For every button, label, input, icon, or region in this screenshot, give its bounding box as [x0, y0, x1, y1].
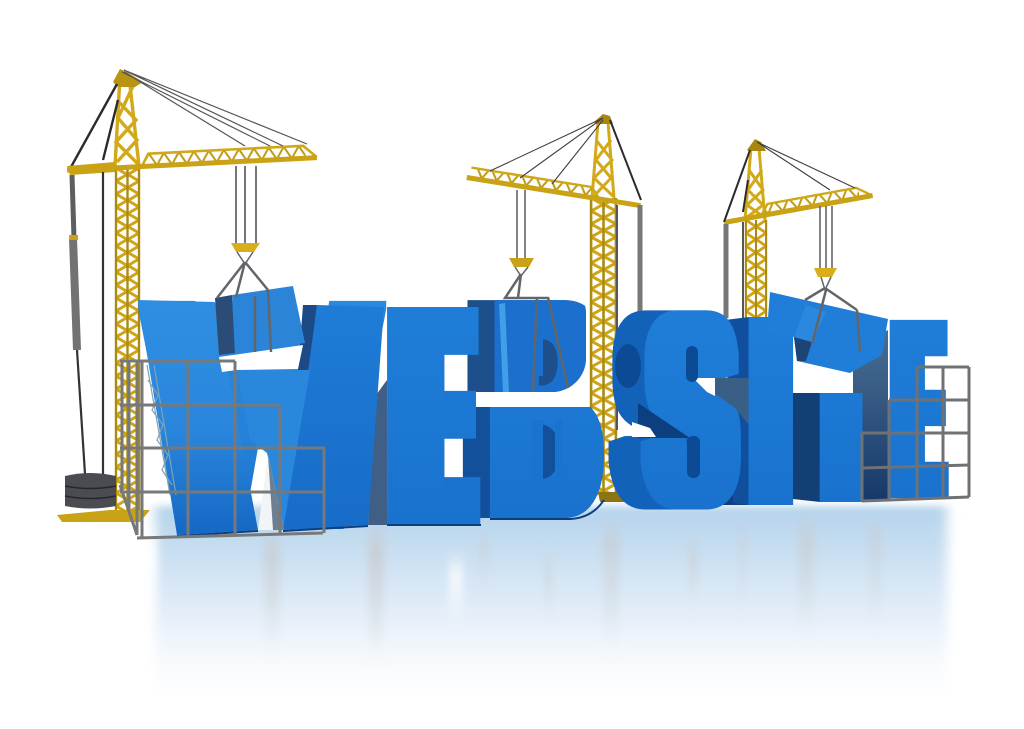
crane 3 hoist ropes — [820, 206, 832, 268]
S void right — [693, 378, 749, 425]
crane 1 tower — [115, 168, 140, 513]
crane 2 back stay — [610, 120, 641, 200]
W left diagonal — [138, 300, 258, 535]
crane 1 head — [113, 69, 143, 87]
streak E to B — [481, 535, 487, 595]
word: WEBSITE — [138, 286, 949, 536]
crane 2 jib — [466, 166, 642, 208]
crane 3 cables — [724, 224, 728, 318]
S lower dark wedge — [638, 403, 690, 438]
crane 2 base — [598, 492, 628, 502]
W top-side extrusion — [298, 305, 317, 372]
T bar facet — [794, 305, 826, 342]
letter T stem front: T — [780, 262, 902, 558]
B sling — [505, 274, 568, 392]
crane 3 — [722, 139, 873, 320]
T bar shading — [794, 337, 812, 361]
streak in S — [689, 545, 697, 605]
crane 3 tower — [745, 220, 767, 320]
T sling — [805, 288, 860, 352]
left scaffold — [120, 361, 325, 538]
streak at W to E — [368, 535, 384, 655]
W sling — [217, 262, 271, 352]
W chunk front — [232, 286, 305, 353]
crane 2 upper tower — [592, 122, 614, 198]
S upper slot — [686, 346, 698, 382]
crane 1 counter jib — [67, 162, 115, 175]
crane 2 ties — [490, 118, 603, 184]
crane 1 — [57, 69, 317, 522]
crane 1 upper tower — [115, 76, 139, 166]
T bar front — [767, 292, 888, 373]
letter I extrusion — [725, 317, 749, 505]
S white gap left — [632, 422, 656, 437]
crane 2 hoist ropes — [517, 190, 525, 258]
crane 3 back stays — [724, 150, 750, 222]
letter B upper front: B — [496, 237, 604, 581]
letter B upper extrusion: B — [496, 237, 604, 581]
letter T stem extrusion — [793, 393, 820, 502]
S extrusion dark inset — [615, 344, 641, 388]
right scaffold verticals — [862, 367, 969, 502]
crane 3 jib — [722, 185, 873, 225]
crane 2 head — [594, 114, 613, 124]
streak S to I — [738, 530, 746, 610]
streak in B — [545, 560, 552, 620]
crane 3 ties — [757, 142, 855, 190]
B lower hole fill left — [532, 420, 543, 484]
letter W front: W — [149, 235, 378, 593]
floor reflection — [140, 506, 947, 700]
letter B lower front: B — [491, 237, 599, 581]
W notch shade — [268, 455, 284, 530]
crane 1 back stays — [71, 84, 118, 167]
crane 2 hook — [509, 258, 534, 267]
letter B lower extrusion: B — [491, 237, 599, 581]
letter I front: I — [750, 266, 792, 555]
right scaffold — [862, 367, 969, 502]
W right diagonal — [283, 305, 384, 530]
crane 1 weights — [65, 473, 116, 508]
slings — [217, 252, 860, 392]
crane 1 counterweight cables — [72, 175, 74, 238]
hanging T bar — [767, 292, 888, 373]
crane 3 hook — [814, 268, 837, 277]
W middle apex — [237, 370, 310, 530]
crane 1 weight lines — [65, 486, 116, 498]
crane 1 hoist ropes — [236, 166, 256, 243]
reflection band — [155, 506, 947, 700]
W gap — [219, 345, 303, 372]
crane 1 ties — [122, 70, 307, 146]
reflection streaks — [140, 525, 882, 655]
shadow between W and E — [368, 380, 387, 525]
B lower hole fill right — [555, 420, 562, 484]
crane 1 base — [57, 510, 150, 522]
S white gap — [693, 378, 715, 396]
W chunk side — [215, 295, 235, 355]
streak at W notch — [264, 540, 280, 650]
crane 2 — [466, 114, 642, 502]
crane 1 hook — [231, 243, 260, 252]
letter E front: E — [404, 251, 461, 581]
streak B to S — [603, 530, 619, 650]
crane 2 cables — [638, 205, 642, 316]
crane 2 tower — [590, 198, 617, 498]
B shadow line — [490, 500, 604, 519]
S lower slot — [687, 436, 700, 478]
W shadow line — [177, 526, 368, 536]
shadow between S and I — [690, 400, 749, 505]
void behind T right — [853, 330, 888, 500]
streak T to E — [868, 525, 882, 625]
crane 3 upper tower — [745, 148, 765, 220]
letter S front: S — [651, 269, 732, 552]
white E gap — [449, 565, 463, 625]
left scaffold verticals — [122, 361, 324, 538]
left scaffold horizontals — [120, 361, 325, 538]
streak I to T — [798, 525, 814, 635]
W floor notch — [258, 455, 284, 530]
hanging W chunk — [215, 286, 305, 355]
letter S extrusion: S — [651, 269, 732, 552]
B highlight strip — [499, 303, 509, 392]
letter E (end) front: E — [899, 270, 937, 546]
crane 1 jib truss — [66, 145, 317, 173]
crane lattice seen beside W — [147, 365, 176, 495]
E shadow line — [387, 524, 481, 526]
white at left edge — [140, 540, 156, 630]
sling tips — [237, 252, 831, 290]
crane 3 head — [747, 139, 766, 151]
B upper hole fill — [536, 332, 543, 376]
right scaffold horizontals — [862, 367, 969, 501]
